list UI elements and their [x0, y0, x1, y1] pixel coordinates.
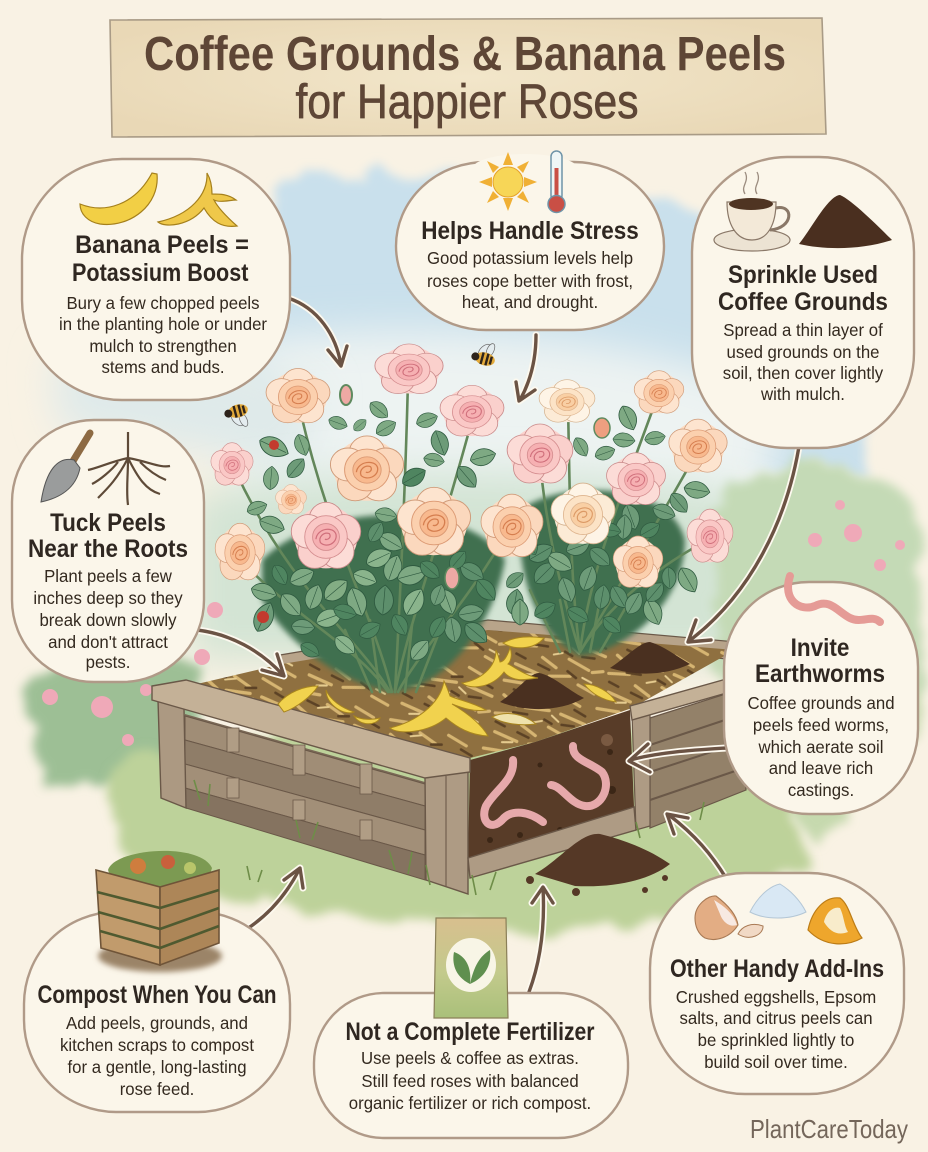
icon: eggshell, salts, citrus peel: [695, 884, 862, 944]
soil top with mulch: [180, 630, 735, 758]
panel: not a complete fertilizer: [314, 918, 628, 1138]
text: Add peels, grounds, and: [66, 1012, 248, 1033]
back rail: [280, 620, 737, 668]
text: roses cope better with frost,: [427, 270, 633, 291]
heading: Other Handy Add-Ins: [670, 954, 884, 982]
heading: Invite: [791, 634, 849, 662]
text: peels feed worms,: [753, 714, 889, 735]
text: organic fertilizer or rich compost.: [349, 1092, 591, 1113]
grass tufts: [194, 780, 704, 895]
arrows: [197, 298, 800, 992]
icon: compost crate: [96, 851, 222, 972]
heading: Near the Roots: [28, 535, 188, 563]
text: used grounds on the: [727, 341, 879, 362]
coffee mounds: [500, 642, 690, 709]
dirt pile: [526, 834, 670, 896]
text: soil, then cover lightly: [723, 362, 883, 383]
text: Crushed eggshells, Epsom: [676, 986, 876, 1007]
text: Good potassium levels help: [427, 247, 633, 268]
heading: Coffee Grounds: [718, 288, 888, 316]
heading: Earthworms: [755, 660, 885, 688]
text: Spread a thin layer of: [723, 319, 883, 340]
text: pests.: [86, 651, 130, 672]
text: Plant peels a few: [44, 565, 172, 586]
left corner post: [158, 700, 186, 808]
text: rose feed.: [120, 1078, 194, 1099]
text: inches deep so they: [33, 587, 183, 608]
banana peels on soil: [278, 637, 616, 736]
icon: banana and peel: [80, 173, 237, 226]
right woven panel: [630, 676, 746, 830]
heading: Potassium Boost: [72, 259, 248, 287]
icon: fertilizer bag: [434, 918, 508, 1018]
heading: Not a Complete Fertilizer: [346, 1017, 594, 1045]
text: salts, and citrus peels can: [679, 1007, 873, 1028]
rose bushes: [211, 344, 733, 692]
text: which aerate soil: [758, 736, 883, 757]
top rail front: [152, 680, 470, 778]
panel: banana peels: [22, 159, 290, 400]
panel: invite earthworms: [724, 576, 918, 814]
front lip plank: [468, 807, 636, 878]
text: Use peels & coffee as extras.: [361, 1047, 579, 1068]
text: Still feed roses with balanced: [361, 1070, 579, 1091]
raised wooden garden bed: [152, 620, 746, 896]
text: mulch to strengthen: [89, 335, 237, 356]
text: break down slowly: [39, 609, 177, 630]
stems: [235, 380, 708, 692]
panel: compost: [24, 851, 290, 1112]
text: in the planting hole or under: [59, 313, 267, 334]
text: stems and buds.: [101, 356, 225, 377]
panel: helps handle stress: [396, 151, 664, 330]
text: build soil over time.: [704, 1051, 848, 1072]
icon: ladybugs on leaves: [249, 432, 292, 635]
watercolor scenery background: [28, 174, 928, 930]
text: castings.: [788, 779, 854, 800]
leaves: [245, 398, 711, 665]
heading: Helps Handle Stress: [421, 217, 639, 245]
text: with mulch.: [760, 383, 845, 404]
panel: other add-ins: [650, 873, 904, 1094]
text: heat, and drought.: [462, 291, 598, 312]
soil cross-section with earthworms: [468, 710, 634, 858]
title text: Coffee Grounds & Banana Peels: [144, 28, 786, 81]
title banner: [110, 18, 826, 137]
front corner post: [425, 770, 468, 894]
text: Bury a few chopped peels: [66, 292, 260, 313]
foliage base: [262, 490, 685, 692]
text: kitchen scraps to compost: [60, 1034, 254, 1055]
text: Coffee grounds and: [747, 692, 895, 713]
icon: trowel and roots: [41, 432, 170, 505]
panel: sprinkle coffee grounds: [692, 157, 914, 448]
text: and don't attract: [48, 631, 168, 652]
text: and leave rich: [769, 757, 873, 778]
heading: Compost When You Can: [37, 980, 277, 1008]
text: for a gentle, long-lasting: [67, 1056, 247, 1077]
roses: [211, 344, 733, 587]
icon: bees: [223, 338, 499, 432]
title text: for Happier Roses: [296, 76, 638, 129]
rose buds: [340, 385, 610, 589]
icon: coffee cup and grounds: [714, 172, 892, 251]
heading: Tuck Peels: [50, 509, 166, 537]
icon: sun and thermometer: [479, 151, 565, 212]
text: be sprinkled lightly to: [698, 1029, 854, 1050]
heading: Sprinkle Used: [728, 261, 878, 289]
heading: Banana Peels =: [75, 231, 249, 259]
panel: tuck peels: [12, 420, 204, 682]
front left woven panel: [185, 714, 425, 880]
icon: earthworm: [788, 576, 880, 622]
